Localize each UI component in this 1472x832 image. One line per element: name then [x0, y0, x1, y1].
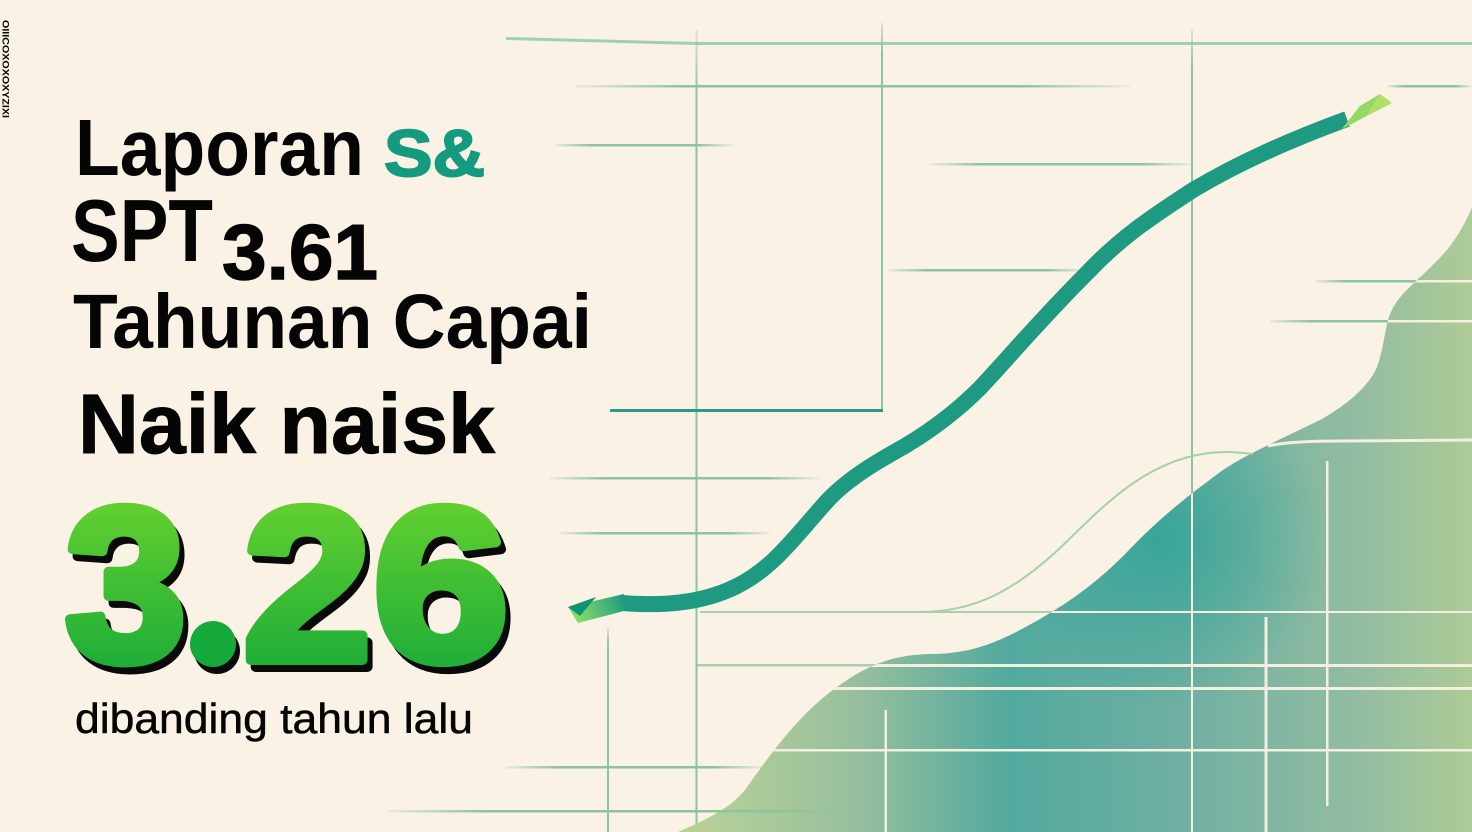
subtitle: dibanding tahun lalu [75, 695, 473, 742]
thin secondary trend line [920, 452, 1253, 612]
number face: . [198, 580, 223, 680]
heading line 1: Laporan [75, 103, 364, 192]
heading line 4: Naik naisk [78, 377, 495, 471]
number face: 6 [373, 463, 509, 707]
arrow tip: top right [1342, 94, 1392, 129]
main growth trend line [568, 94, 1392, 623]
heading block [71, 103, 592, 471]
vertical side label: OIIICOXOXOXYZIXI [0, 20, 10, 118]
heading line 3: Tahunan Capai [73, 279, 592, 365]
heading line 2: 3.61 [222, 208, 378, 296]
heading line 1: S& [384, 116, 485, 190]
number face: 3 [65, 464, 186, 707]
bottom-right gradient area chart [678, 207, 1472, 832]
number shadow: . [202, 587, 227, 687]
number shadow: 2 [248, 470, 377, 714]
teal horizontal marker line [610, 409, 883, 412]
number shadow: 3 [70, 471, 191, 714]
number shadow [70, 470, 514, 714]
heading line 2 [71, 181, 378, 296]
big number [65, 463, 514, 714]
arrow tail: bottom left [568, 594, 624, 623]
light grid lines over area [700, 280, 1472, 832]
low grid line crossing area edge [388, 810, 870, 812]
heading line 2: SPT [71, 181, 213, 280]
number face: 2 [243, 463, 372, 707]
number shadow: 6 [378, 470, 514, 714]
chart grid lines [505, 23, 1472, 832]
number face [65, 463, 509, 707]
light upper line over area [1268, 440, 1472, 446]
